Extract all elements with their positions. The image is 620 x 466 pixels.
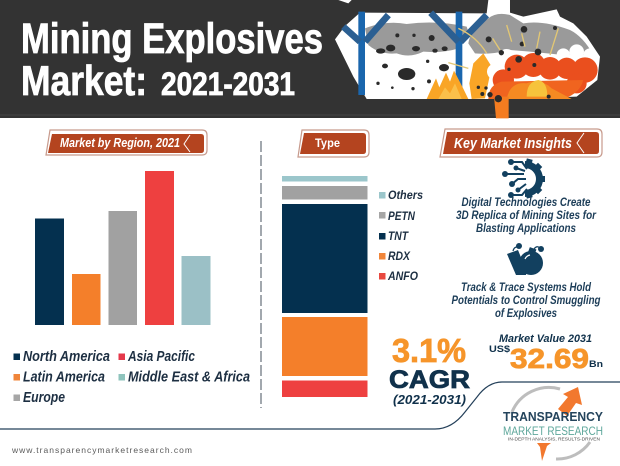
panel: type — [282, 130, 423, 397]
legend: type: TNT — [388, 229, 409, 243]
legend: type: RDX — [388, 249, 411, 263]
heading: key market insights: Key Market Insights — [454, 135, 572, 152]
logo: transparency market research: TRANSPARENCY — [503, 410, 604, 424]
insight text: digital technologies: 3D Replica of Mining Sites for — [456, 210, 596, 222]
callout: market value: Bn — [589, 359, 603, 370]
legend: region: Asia Pacific — [127, 349, 195, 365]
illustration: mine blast — [335, 0, 600, 118]
callout: cagr: (2021-2031) — [393, 393, 466, 407]
legend: region — [14, 349, 250, 406]
legend: type: ANFO — [387, 269, 419, 283]
heading: key market insights — [440, 129, 602, 157]
insight text: digital technologies — [456, 197, 596, 235]
insight text: digital technologies: Digital Technologies Create — [462, 197, 591, 209]
panel: market by region — [14, 130, 250, 406]
stacked bar: type — [282, 176, 368, 397]
legend: type — [379, 188, 423, 283]
title: Mining Explosives — [21, 15, 323, 63]
heading: market by region — [46, 130, 207, 155]
insight text: track and trace: Track & Trace Systems Hold — [461, 282, 592, 294]
callout: market value: 32.69 — [510, 343, 589, 374]
logo: transparency market research: MARKET RESEARCH — [503, 424, 603, 438]
icon: digital gear — [502, 158, 545, 199]
bar chart: region — [35, 171, 210, 325]
legend: region: Europe — [23, 390, 65, 406]
legend: region: Middle East & Africa — [128, 370, 250, 386]
panel: key market insights — [440, 129, 602, 320]
callout: market value: US$ — [489, 344, 511, 355]
legend: type: PETN — [388, 209, 415, 223]
title: 2021-2031 — [161, 66, 295, 102]
title — [21, 15, 323, 104]
heading: type — [298, 130, 369, 157]
legend: region: Latin America — [23, 370, 105, 386]
callout: cagr: 3.1% — [392, 332, 466, 369]
heading: type: Type — [315, 136, 340, 150]
callout: cagr — [389, 332, 470, 407]
website url: www.transparencymarketresearch.com — [11, 445, 192, 455]
logo: transparency market research: IN-DEPTH ANALYSIS, RESULTS-DRIVEN — [508, 436, 600, 442]
footer line — [0, 382, 620, 429]
callout: market value — [489, 333, 603, 374]
title: Market: — [21, 57, 147, 104]
insight text: track and trace: of Explosives — [495, 308, 557, 320]
legend: region: North America — [23, 349, 110, 365]
callout: cagr: CAGR — [389, 366, 470, 394]
legend: type: Others — [388, 188, 423, 202]
divider — [260, 141, 262, 408]
callout: market value: Market Value 2031 — [499, 333, 592, 345]
icon: dynamite and bomb — [507, 243, 544, 275]
insight text: digital technologies: Blasting Applications — [476, 223, 576, 235]
heading: market by region: Market by Region, 2021 — [60, 136, 180, 150]
header band — [0, 0, 620, 118]
logo: transparency market research — [503, 387, 604, 461]
insight text: track and trace — [452, 282, 600, 320]
